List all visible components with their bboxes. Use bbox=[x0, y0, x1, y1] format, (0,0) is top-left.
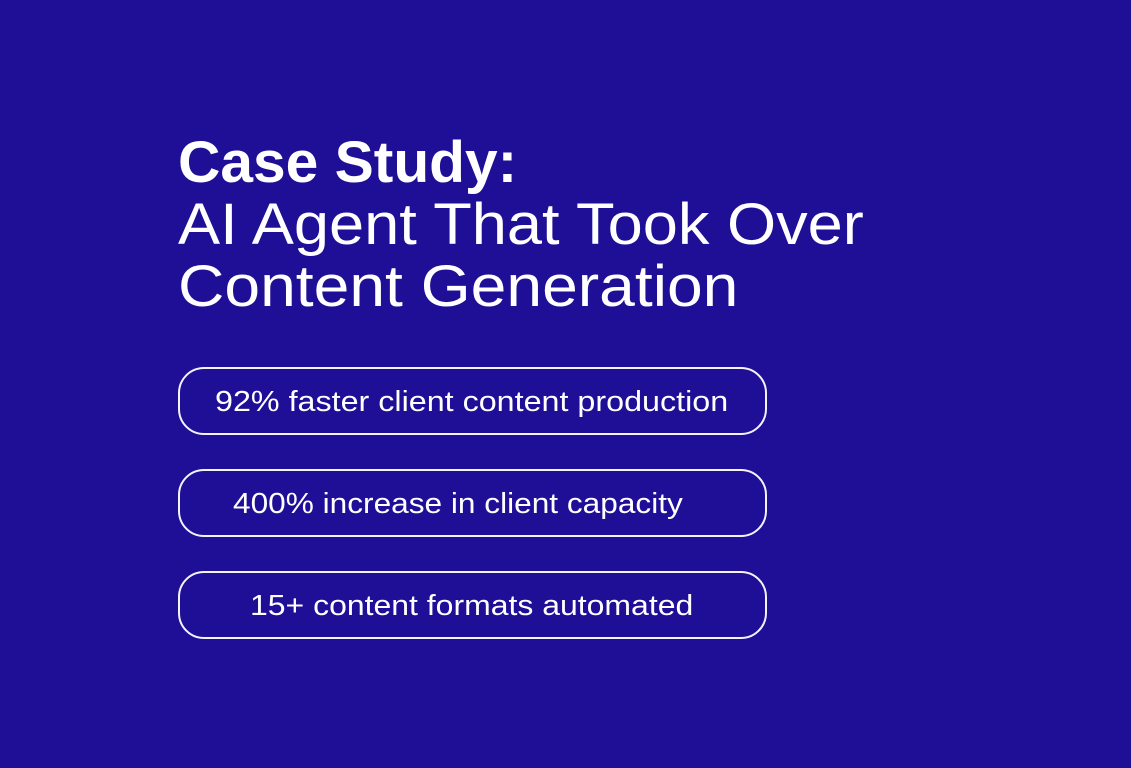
stat pill: faster production bbox=[178, 367, 767, 435]
stat pill: client capacity bbox=[178, 469, 767, 537]
stat text: 92% faster client content production bbox=[215, 386, 728, 418]
title line: AI agent: AI Agent That Took Over bbox=[178, 192, 864, 257]
title line: case study: Case Study: bbox=[178, 130, 517, 195]
stat text: 15+ content formats automated bbox=[250, 590, 693, 622]
stat text: 400% increase in client capacity bbox=[233, 488, 683, 520]
stat pill: content formats bbox=[178, 571, 767, 639]
title bbox=[178, 130, 864, 319]
title line: content generation: Content Generation bbox=[178, 254, 738, 319]
